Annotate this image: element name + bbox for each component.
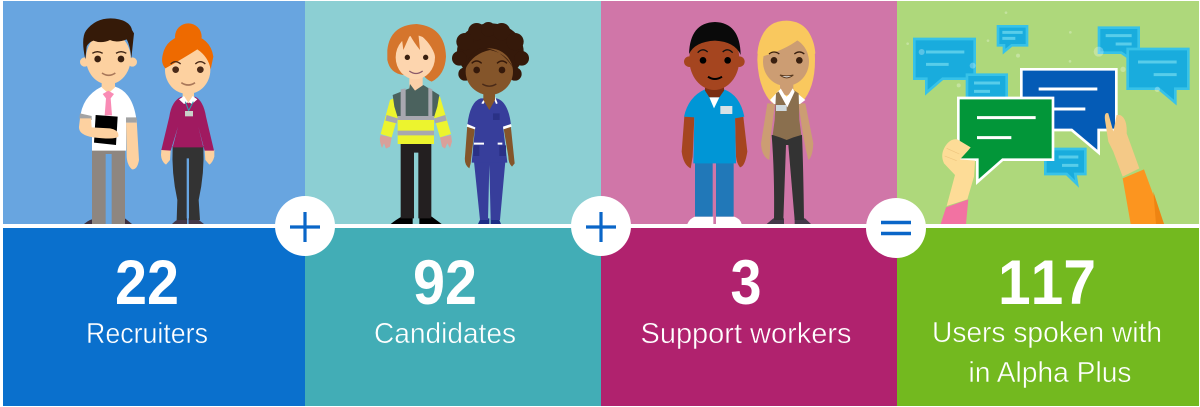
- label: Users spoken with in Alpha Plus: [932, 317, 1162, 389]
- icon: candidate in high-visibility jacket: [380, 24, 452, 224]
- icon: plus sign between candidates and support workers: [571, 196, 631, 256]
- label: Support workers: Support workers: [640, 318, 852, 350]
- panel: users illustration background: [897, 1, 1199, 224]
- panel: users spoken with statistic: [897, 228, 1199, 406]
- icon: male recruiter holding notebook: [79, 18, 139, 224]
- label: Users spoken with in Alpha Plus: Users spoken with: [932, 317, 1162, 349]
- label: Candidates: Candidates: [374, 318, 516, 350]
- icon: dark blue speech bubble: [1021, 69, 1116, 153]
- number: 3: 3: [730, 248, 762, 318]
- icon: left hand with pink sleeve: [941, 139, 975, 224]
- panel: candidates statistic: [305, 228, 601, 406]
- icon: female support worker with blonde hair: [757, 21, 815, 224]
- icon: plus sign between recruiters and candidates: [275, 196, 335, 256]
- icon: male support worker in blue scrubs: [682, 22, 747, 224]
- number: 22: 22: [115, 248, 179, 318]
- panel: recruiters statistic: [3, 228, 305, 406]
- panel: candidates illustration background: [305, 1, 601, 224]
- panel: recruiters illustration background: [3, 1, 305, 224]
- icon: female recruiter in maroon top: [161, 23, 214, 224]
- icon: background light blue speech bubbles: [914, 26, 1188, 184]
- icon: candidate nurse in navy uniform: [452, 22, 529, 224]
- icon: right hand with orange sleeve: [1105, 113, 1164, 224]
- number: 92: 92: [413, 248, 477, 318]
- label: Users spoken with in Alpha Plus: in Alpha Plus: [968, 357, 1132, 389]
- number: 117: 117: [998, 248, 1096, 318]
- panel: support workers statistic: [601, 228, 897, 406]
- label: Recruiters: Recruiters: [86, 318, 208, 350]
- icon: green speech bubble: [958, 98, 1053, 182]
- icon: equals sign before total: [866, 198, 926, 258]
- icon: conversation speech bubbles held by two hands: [906, 11, 1188, 224]
- panel: support workers illustration background: [601, 1, 897, 224]
